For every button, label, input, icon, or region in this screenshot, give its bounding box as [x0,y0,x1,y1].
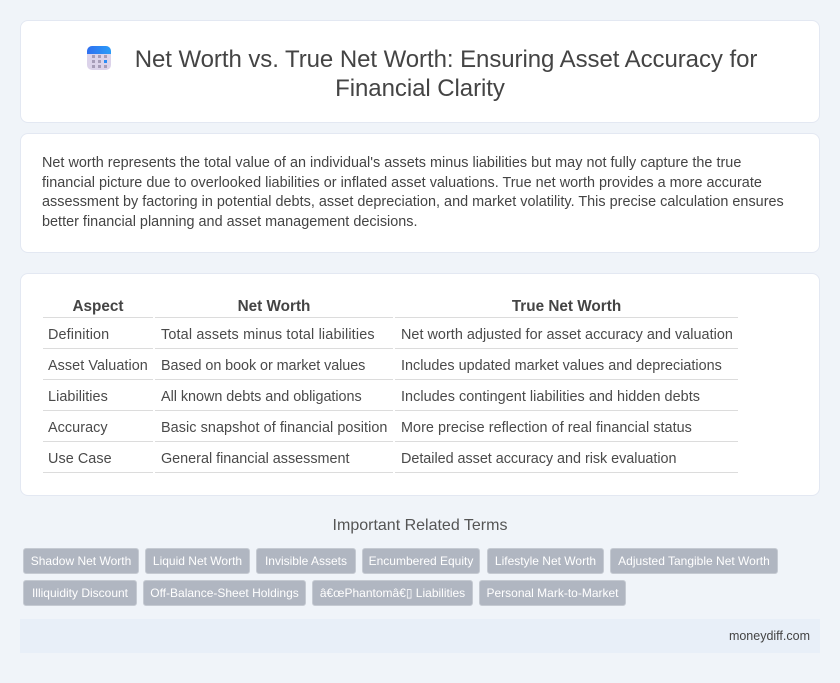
row: definition: Total assets minus total liabilities [161,327,375,343]
tag list: related terms: Liquid Net Worth [153,554,242,568]
heading: related terms: Important Related Terms [333,517,507,534]
tag list: related terms: Shadow Net Worth [31,554,131,568]
table headers: Net Worth [238,298,310,315]
tag list: related terms: â€œPhantomâ€▯ Liabilities [320,586,465,600]
intro paragraph: better financial planning and asset management decisions. [42,214,418,230]
footer bar [20,619,820,653]
table headers [72,298,621,315]
row: accuracy: Basic snapshot of financial position [161,420,388,436]
title [135,46,757,102]
title: Net Worth vs. True Net Worth: Ensuring Asset Accuracy for [135,46,757,73]
panel: title header [20,20,820,123]
panel: intro text [20,133,820,253]
icon: calendar [87,46,111,70]
intro paragraph: assessment by factoring in potential debts, asset depreciation, and market volatility. This precise calculation ensures [42,194,784,210]
row: accuracy: Accuracy [48,420,108,436]
tag list: related terms: Lifestyle Net Worth [495,554,596,568]
row: definition: Definition [48,327,109,343]
tag list: related terms: Personal Mark-to-Market [486,586,619,600]
tag list: related terms [23,548,778,606]
tag list: related terms: Adjusted Tangible Net Worth [618,554,770,568]
row: asset valuation: Includes updated market values and depreciations [401,358,722,374]
panel: comparison table [20,273,820,496]
title: Financial Clarity [335,75,505,102]
row: liabilities: All known debts and obligations [161,389,362,405]
row: liabilities: Includes contingent liabilities and hidden debts [401,389,700,405]
row: use case: Detailed asset accuracy and risk evaluation [401,451,676,467]
table headers: True Net Worth [512,298,621,315]
row: liabilities [48,389,700,405]
intro paragraph: financial picture due to overlooked liabilities or inflated asset valuations. True net worth provides a more accurate [42,174,762,190]
row: asset valuation: Asset Valuation [48,358,148,374]
row: definition: Net worth adjusted for asset accuracy and valuation [401,327,733,343]
row: definition [48,327,733,343]
row: asset valuation: Based on book or market values [161,358,365,374]
row: use case [48,451,676,467]
tag list: related terms: Illiquidity Discount [32,586,128,600]
tag list: related terms: Off-Balance-Sheet Holdings [150,586,299,600]
footer source: moneydiff.com [729,629,810,643]
tag list: related terms: Invisible Assets [265,554,347,568]
row: use case: General financial assessment [161,451,350,467]
row: asset valuation [48,358,722,374]
tag list: related terms: Encumbered Equity [369,554,473,568]
table headers: Aspect [72,298,124,315]
row: liabilities: Liabilities [48,389,108,405]
row: accuracy [48,420,692,436]
intro paragraph: Net worth represents the total value of an individual's assets minus liabilities but may not fully capture the true [42,155,741,171]
row: accuracy: More precise reflection of real financial status [401,420,692,436]
row: use case: Use Case [48,451,112,467]
intro paragraph [42,155,784,230]
